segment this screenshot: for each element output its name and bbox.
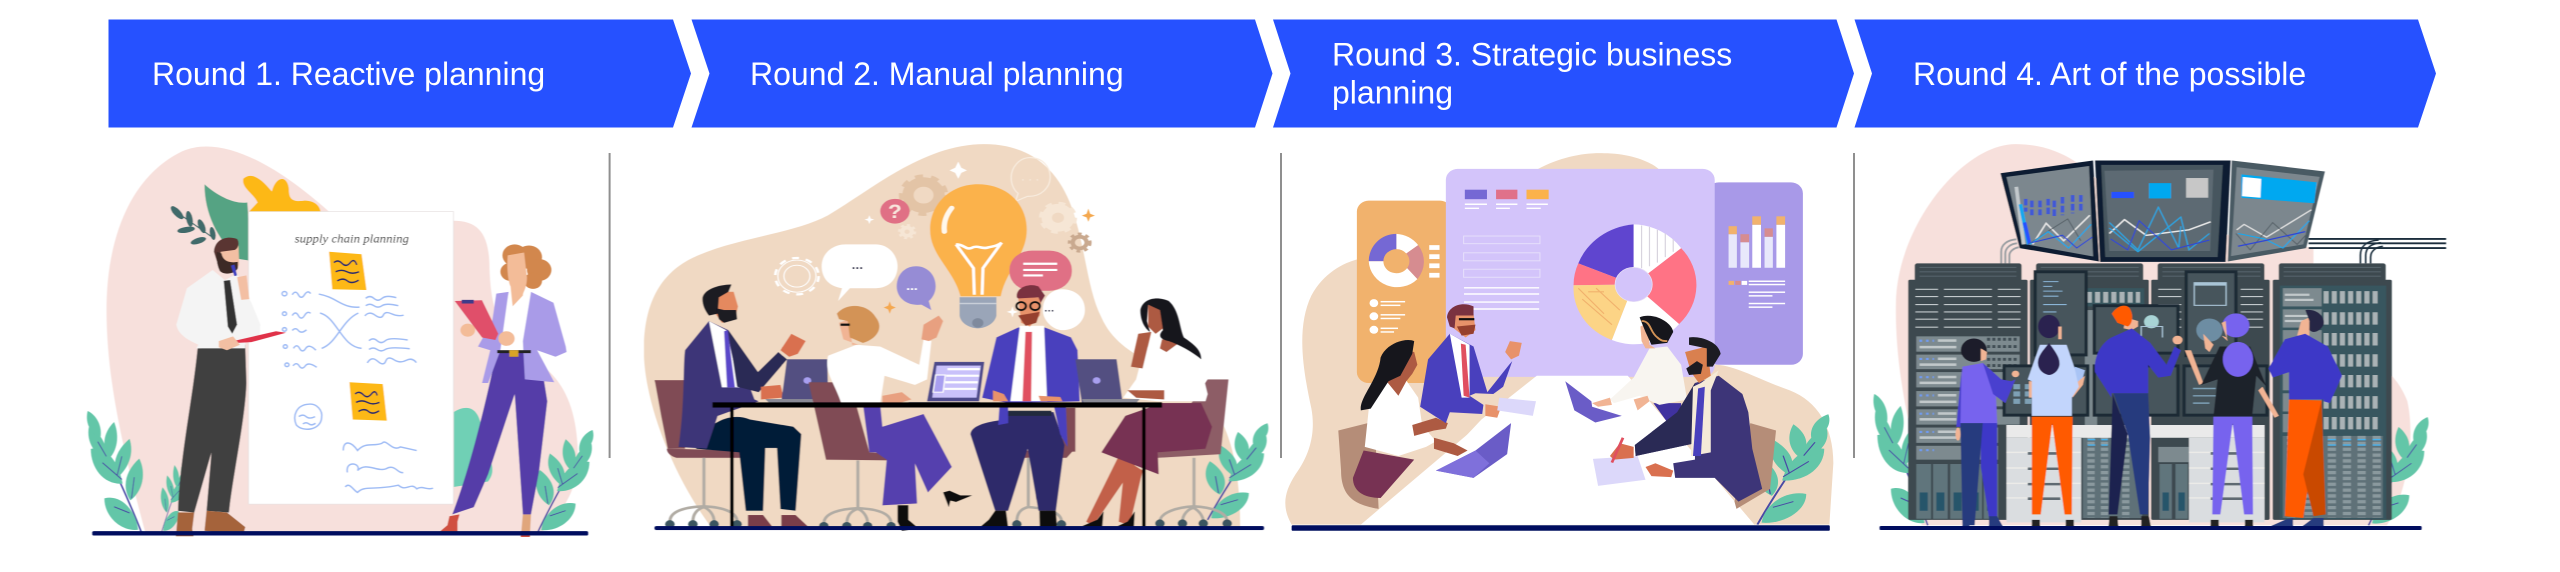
process banner <box>108 20 2436 128</box>
plant: lower left <box>87 411 143 532</box>
purple speech bubble: ... <box>906 279 918 293</box>
yellow leaf <box>243 176 321 213</box>
banner: round 1 <box>108 20 691 128</box>
illustration: reactive planning, two people at a whiteboard <box>87 146 593 537</box>
person 1 <box>1956 339 2019 527</box>
server rack 4 <box>2273 263 2392 520</box>
divider 2 <box>1280 153 1282 458</box>
laptop centre <box>908 362 984 406</box>
server rack 1 <box>1908 263 2028 520</box>
woman back right <box>1592 316 1687 425</box>
white table <box>1361 376 1754 525</box>
person 4 <box>2185 313 2279 527</box>
banner: round 3 <box>1273 20 1854 128</box>
monitor right <box>2228 161 2325 262</box>
green leaf <box>204 184 251 261</box>
beige background blob <box>1285 153 1833 525</box>
outline speech bubble <box>1011 158 1050 201</box>
chair right <box>1734 423 1776 509</box>
plant <box>1206 423 1268 520</box>
white speech bubble left: ... <box>852 258 863 272</box>
banner: round 4: Round 4. Art of the possible <box>1913 56 2306 92</box>
purple dashboard side panel <box>1707 182 1803 365</box>
white speech bubble left <box>822 244 898 301</box>
scribbled map <box>282 291 433 492</box>
person 2 <box>2028 315 2085 527</box>
woman left <box>1338 340 1468 509</box>
plant <box>1755 414 1829 525</box>
woman with clipboard <box>435 244 567 537</box>
plant: lower right <box>536 430 593 532</box>
plant: small lower left <box>161 458 187 532</box>
paper and pen <box>1593 438 1673 486</box>
man bottom right <box>1635 337 1762 502</box>
chair left with man <box>655 285 809 528</box>
white table foreground <box>1383 376 1754 525</box>
monitor left <box>2000 161 2099 262</box>
pink speech bubble <box>1009 251 1072 291</box>
white desk and drawers <box>2007 425 2264 522</box>
laptop bottom left <box>1436 423 1511 478</box>
question mark bubble <box>880 199 910 224</box>
question mark bubble: ? <box>888 202 902 223</box>
woman on right <box>1080 298 1232 528</box>
ground line <box>1880 526 2422 530</box>
banner: round 2 <box>692 20 1272 128</box>
sticky note bottom <box>349 382 387 421</box>
person 5 <box>2269 310 2342 527</box>
illustration: art of the possible, team at data centre <box>1873 144 2446 530</box>
plant right <box>2367 417 2429 525</box>
purple speech bubble <box>897 266 936 310</box>
wall monitors <box>2000 161 2325 262</box>
colour legend <box>1465 190 1549 208</box>
laptop right <box>1075 359 1140 403</box>
pink background blob <box>1896 144 2410 525</box>
man pointing <box>1420 304 1522 423</box>
main dashboard panel <box>1446 169 1715 377</box>
form lines <box>1464 236 1540 309</box>
server rack 3 <box>2151 263 2270 520</box>
whiteboard <box>249 212 453 504</box>
illustration: strategic business planning, team with dashboards <box>1285 153 1833 531</box>
laptop right <box>1565 381 1622 422</box>
divider 3 <box>1853 153 1855 458</box>
outline speech bubble: . . . <box>1021 171 1039 183</box>
pink background blob <box>107 146 578 533</box>
man with glasses <box>970 285 1080 529</box>
woman with raised hand <box>809 306 972 531</box>
paper <box>1497 398 1536 416</box>
whiteboard title: supply chain planning <box>295 232 409 245</box>
ground line <box>655 526 1264 530</box>
light bulb <box>930 184 1027 328</box>
orange dashboard panel <box>1357 201 1452 383</box>
banner: round 3: Round 3. Strategic business <box>1332 36 1732 72</box>
cables <box>2001 239 2446 263</box>
teal leaf behind woman <box>453 408 493 487</box>
plant left <box>1873 394 1930 525</box>
person 3 <box>2095 306 2182 527</box>
sticky note top <box>329 252 367 290</box>
side panel legend <box>1729 281 1785 308</box>
monitor centre <box>2095 161 2231 262</box>
sparkles <box>865 162 1095 317</box>
rack screens <box>2004 272 2267 415</box>
laptop left <box>765 359 828 403</box>
beige background blob <box>644 144 1240 527</box>
banner: round 4 <box>1854 20 2436 128</box>
divider 1 <box>609 153 611 458</box>
banner: round 2: Round 2. Manual planning <box>750 56 1124 92</box>
stacked bars <box>1729 216 1785 268</box>
banner: round 3: planning <box>1332 74 1453 110</box>
white speech bubble right <box>1043 289 1085 330</box>
white speech bubble right: ... <box>1044 303 1054 314</box>
illustration: manual planning, team at table under a light bulb <box>644 144 1268 531</box>
banner: round 1: Round 1. Reactive planning <box>152 56 545 92</box>
ground line <box>92 531 588 536</box>
server rack 2 <box>2030 263 2149 520</box>
legend <box>1370 245 1440 334</box>
small dark branch <box>169 204 217 246</box>
gears <box>775 177 1090 294</box>
donut chart <box>1369 234 1424 287</box>
man with clipboard <box>176 238 286 536</box>
table <box>712 402 1162 528</box>
pie chart <box>1573 224 1696 344</box>
ground line <box>1292 525 1830 531</box>
